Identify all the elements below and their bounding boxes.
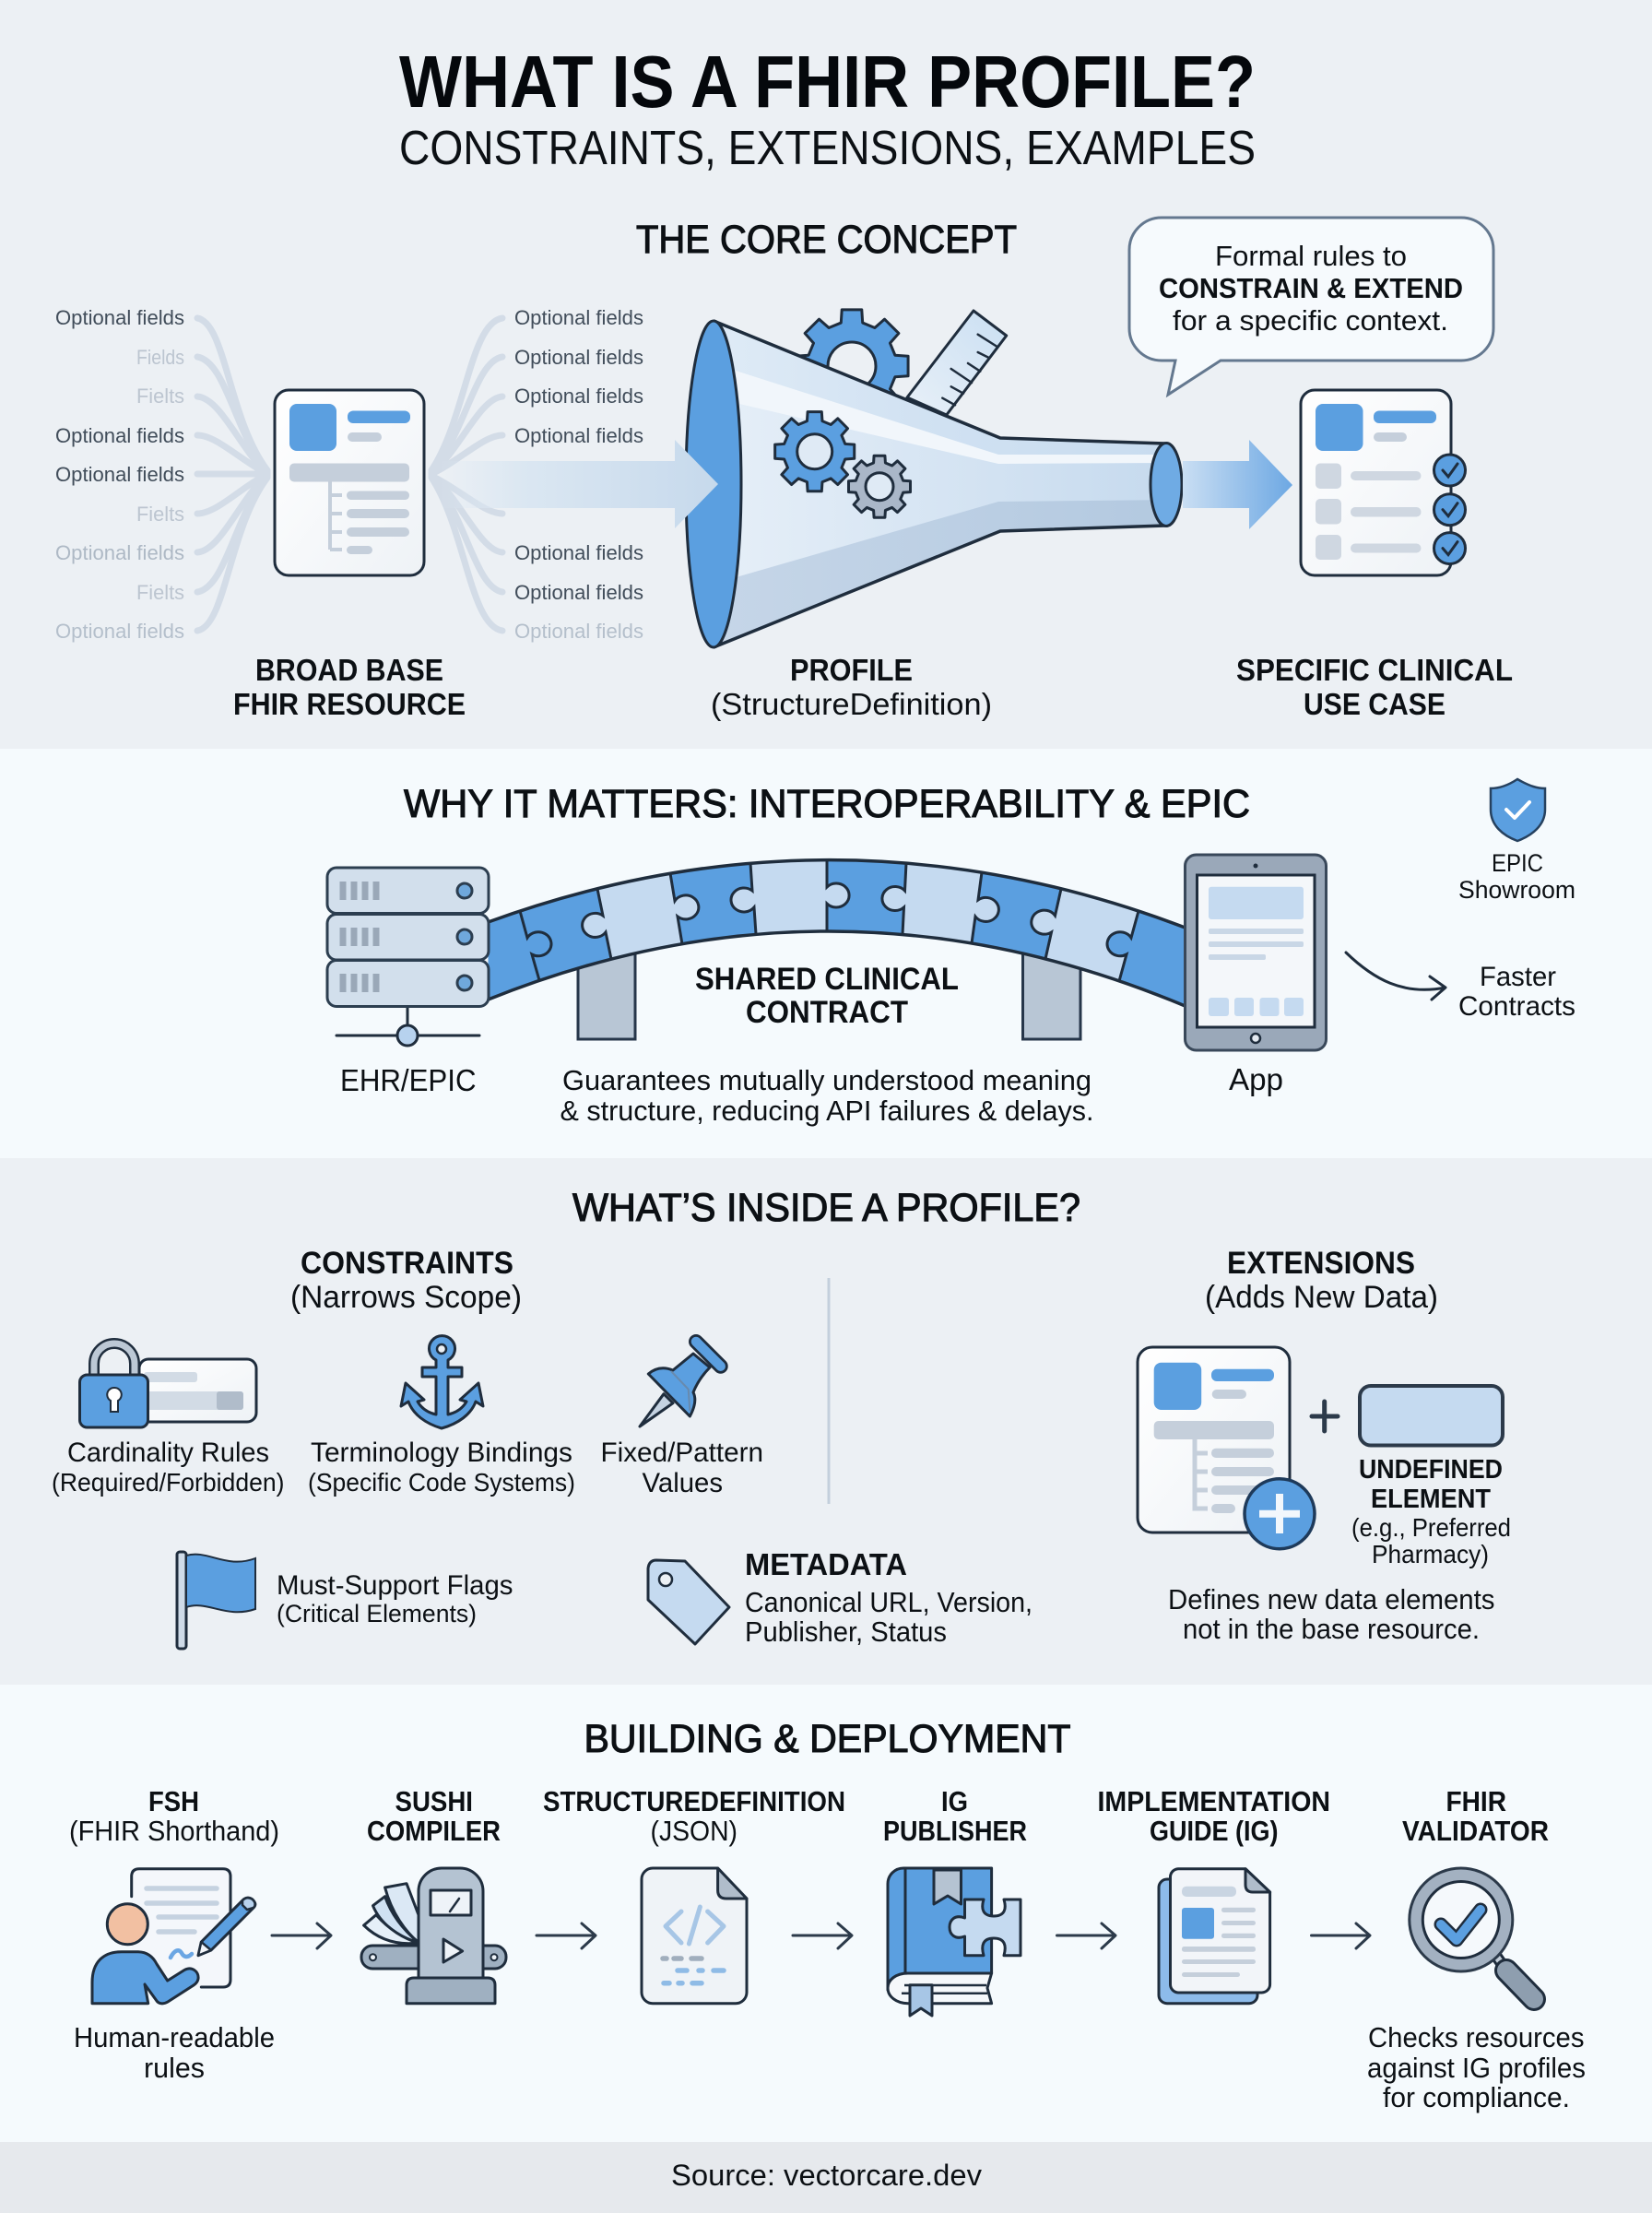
text: guarantees description: & structure, reducing API failures & delays. [560,1095,1093,1127]
arrow: resource into funnel [439,440,718,528]
text: terminology bindings: (Specific Code Systems) [308,1468,575,1497]
text: metadata [745,1547,1032,1648]
callout: formal rules: Formal rules to [1215,240,1407,272]
icon: metadata tag [648,1560,729,1644]
text: undefined element: UNDEFINED [1359,1455,1503,1485]
icon: JSON document [642,1868,747,2004]
left optional fields list: Optional fields [55,463,184,486]
icon: extended resource document [1138,1347,1315,1549]
label: profile structure definition [711,653,992,721]
icon: person writing FSH [92,1869,255,2004]
heading: extensions [1205,1246,1438,1315]
heading: constraints: CONSTRAINTS [301,1246,513,1281]
text: defines new data elements [1168,1583,1495,1645]
arrow: structuredefinition to IG publisher [793,1923,852,1948]
icon: app tablet [1186,855,1326,1050]
text: terminology bindings [308,1438,575,1497]
text: checks resources [1367,2021,1586,2113]
panel: what's inside a profile [0,1158,1652,1685]
label: App: App [1229,1062,1283,1096]
label: profile structure definition: (StructureDefinition) [711,687,992,721]
icon: base FHIR resource document [275,390,424,575]
left optional fields list: Optional fields [55,424,184,447]
icon: puzzle bridge [489,858,1184,1007]
icon: EHR server stack [327,868,489,1046]
title: WHAT IS A FHIR PROFILE? [399,41,1256,123]
arrow: FSH to SUSHI [272,1923,331,1948]
left optional fields list: Optional fields [55,306,184,329]
text: defines new data elements: Defines new data elements [1168,1583,1495,1615]
text: human-readable rules [74,2021,275,2084]
arrow: SUSHI to structuredefinition [537,1923,596,1948]
icon: undefined element box [1360,1386,1503,1446]
title: CONSTRAINTS, EXTENSIONS, EXAMPLES [399,122,1256,175]
panel: building and deployment [0,1685,1652,2142]
callout: formal rules: CONSTRAIN & EXTEND [1159,272,1463,304]
heading: constraints: (Narrows Scope) [290,1280,522,1315]
right optional fields list: Optional fields [514,541,643,564]
text: source: Source: vectorcare.dev [671,2159,982,2192]
label: broad base FHIR resource [233,653,466,721]
icon: SUSHI compiler machine [361,1868,506,2004]
icon: ruler [907,311,1007,415]
label: profile structure definition: PROFILE [790,653,913,687]
left optional fields list: Optional fields [55,620,184,643]
text: undefined element: ELEMENT [1371,1485,1491,1514]
label: specific clinical use case: USE CASE [1304,687,1446,721]
icon: large gear behind funnel [796,310,908,422]
label: implementation guide [1097,1785,1330,1847]
text: undefined element [1351,1455,1511,1568]
icon: plus sign [1312,1402,1338,1431]
icon: profile funnel [686,314,1182,657]
label: EPIC Showroom: EPIC [1492,849,1543,877]
label: specific clinical use case [1236,653,1513,721]
label: FHIR validator: VALIDATOR [1402,1815,1549,1847]
label: IG publisher: IG [941,1785,968,1817]
text: fixed pattern values: Values [642,1468,723,1498]
icon: implementation guide documents [1159,1869,1270,2004]
right optional fields list: Optional fields [514,424,643,447]
text: human-readable rules: rules [144,2052,205,2084]
label: FSH: FSH [148,1785,199,1817]
label: IG publisher [883,1785,1027,1847]
icon: must-support flag [177,1552,255,1649]
label: SUSHI compiler: SUSHI [395,1785,473,1817]
text: metadata: Canonical URL, Version, [745,1586,1032,1618]
label: IG publisher: PUBLISHER [883,1815,1027,1847]
text: must-support flags [277,1570,513,1627]
right optional fields list: Optional fields [514,620,643,643]
label: specific clinical use case: SPECIFIC CLINICAL [1236,653,1513,687]
heading: extensions: EXTENSIONS [1227,1246,1415,1281]
icon: cardinality lock and card [79,1343,256,1427]
heading: constraints [290,1246,522,1315]
label: EPIC Showroom: Showroom [1458,876,1575,904]
label: structuredefinition JSON: STRUCTUREDEFINITION [543,1785,845,1817]
icon: terminology anchor [401,1336,483,1428]
text: checks resources: against IG profiles [1367,2052,1586,2084]
label: broad base FHIR resource: FHIR RESOURCE [233,687,466,721]
right optional fields list [514,306,643,643]
text: metadata: METADATA [745,1547,907,1581]
right converging field lines [431,318,502,631]
text: checks resources: for compliance. [1383,2081,1570,2113]
text: defines new data elements: not in the base resource. [1183,1613,1480,1645]
heading: what's inside: WHAT’S INSIDE A PROFILE? [572,1186,1080,1230]
icon: IG publisher book [888,1868,1021,2016]
heading: why it matters: WHY IT MATTERS: INTEROPERABILITY & EPIC [404,782,1250,826]
left converging field lines [197,318,267,631]
text: undefined element: (e.g., Preferred [1351,1513,1511,1542]
icon: FHIR validator magnifier [1410,1868,1534,1999]
panel: why it matters [0,749,1652,1158]
text: metadata: Publisher, Status [745,1615,947,1648]
arrow: IG publisher to implementation guide [1056,1923,1115,1948]
heading: extensions: (Adds New Data) [1205,1280,1438,1315]
right optional fields list: Optional fields [514,581,643,604]
icon: bridge pillars [578,941,1080,1039]
label: faster contracts [1458,962,1575,1022]
title [399,41,1256,175]
heading: the core concept: THE CORE CONCEPT [636,218,1017,262]
arrow: implementation guide to validator [1311,1923,1370,1948]
text: fixed pattern values: Fixed/Pattern [601,1438,763,1468]
label: FSH: (FHIR Shorthand) [69,1815,279,1847]
label: shared clinical contract: CONTRACT [746,995,908,1030]
text: must-support flags: Must-Support Flags [277,1570,513,1601]
label: SUSHI compiler: COMPILER [367,1815,501,1847]
text: fixed pattern values [601,1438,763,1498]
label: implementation guide: IMPLEMENTATION [1097,1785,1330,1817]
text: cardinality rules: Cardinality Rules [67,1438,269,1468]
label: shared clinical contract [695,962,959,1030]
panel: footer source [0,2142,1652,2213]
label: implementation guide: GUIDE (IG) [1150,1815,1278,1847]
left optional fields list [55,306,184,643]
left optional fields list: Fielts [136,385,184,408]
label: structuredefinition JSON [543,1785,845,1847]
arrow: funnel to use case [1183,440,1292,529]
label: faster contracts: Faster [1480,962,1556,992]
text: cardinality rules [52,1438,284,1497]
heading: building and deployment: BUILDING & DEPLOYMENT [584,1717,1071,1761]
label: EHR/EPIC: EHR/EPIC [340,1063,476,1097]
left optional fields list: Fielts [136,581,184,604]
label: FHIR validator: FHIR [1446,1785,1506,1817]
arrow: to faster contracts [1346,953,1446,1000]
right optional fields list: Optional fields [514,346,643,369]
text: cardinality rules: (Required/Forbidden) [52,1468,284,1497]
label: FHIR validator [1402,1785,1549,1847]
icon: fixed value push pin [640,1342,721,1426]
label: broad base FHIR resource: BROAD BASE [255,653,443,687]
label: structuredefinition JSON: (JSON) [651,1815,738,1847]
right optional fields list: Optional fields [514,306,643,329]
panel: the core concept [56,55,1512,721]
text: checks resources: Checks resources [1368,2021,1584,2053]
text: guarantees description [560,1064,1093,1127]
text: guarantees description: Guarantees mutually understood meaning [562,1064,1092,1096]
label: SUSHI compiler [367,1785,501,1847]
label: EPIC Showroom [1458,849,1575,904]
label: FSH [69,1785,279,1847]
text: human-readable rules: Human-readable [74,2021,275,2053]
right optional fields list: Optional fields [514,385,643,408]
icon: EPIC shield [1491,779,1545,841]
label: faster contracts: Contracts [1458,991,1575,1022]
label: shared clinical contract: SHARED CLINICAL [695,962,959,997]
text: undefined element: Pharmacy) [1372,1540,1489,1568]
left optional fields list: Fields [136,346,184,369]
left optional fields list: Fielts [136,503,184,526]
text: must-support flags: (Critical Elements) [277,1600,477,1627]
callout: formal rules [1129,218,1493,395]
icon: specific use case document [1301,390,1466,575]
text: terminology bindings: Terminology Bindings [311,1438,572,1468]
callout: formal rules: for a specific context. [1173,304,1448,337]
left optional fields list: Optional fields [55,541,184,564]
icon: gears inside funnel [775,412,910,517]
